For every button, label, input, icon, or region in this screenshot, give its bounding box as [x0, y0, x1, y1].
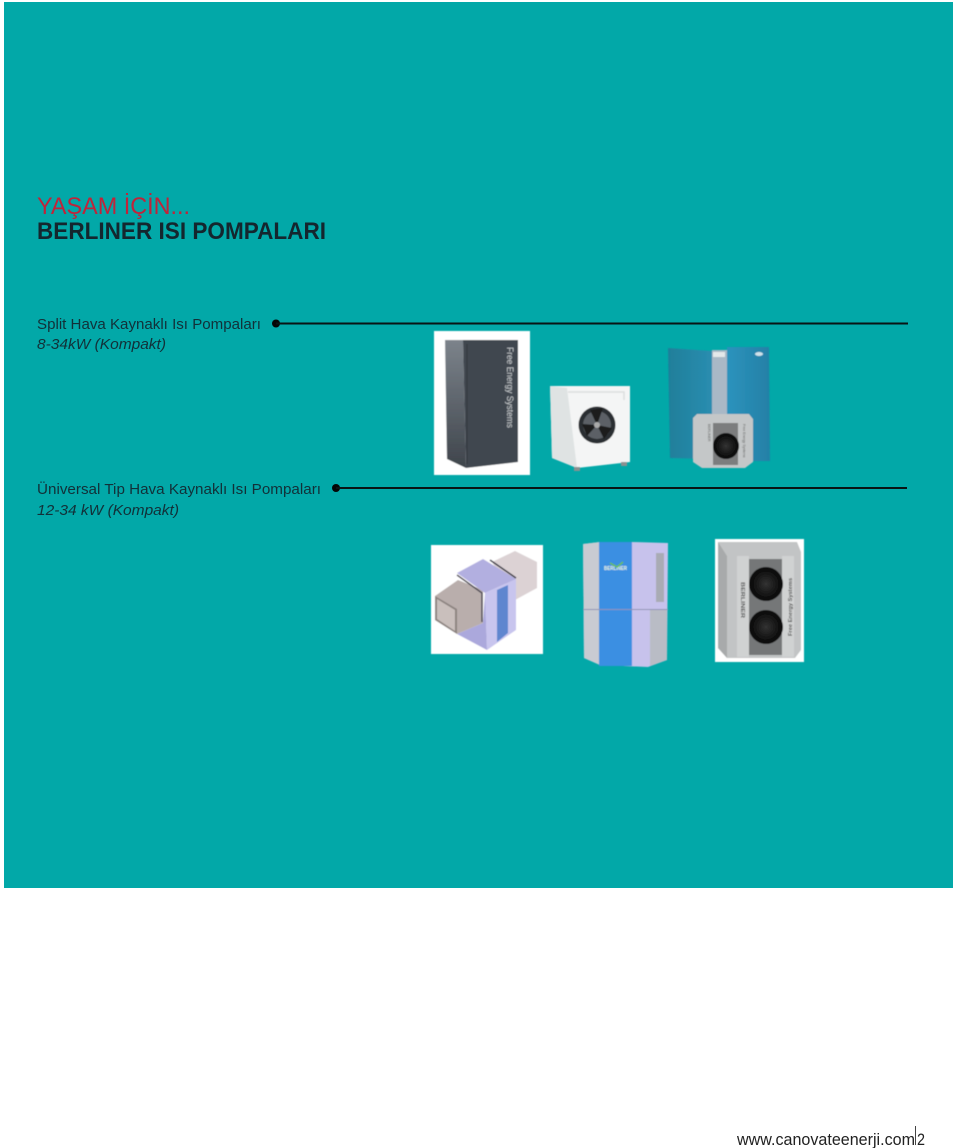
product: dark cabinet [434, 331, 530, 475]
product: blue cabinet with outdoor unit: BERLINER [707, 424, 711, 442]
product: twin fan outdoor unit: BERLINER [739, 582, 745, 618]
teal background panel [4, 2, 953, 888]
section 1 label: split [37, 316, 261, 353]
section 1 label: split: 8-34kW (Kompakt) [37, 336, 166, 353]
leader line 2 [332, 484, 907, 492]
title: BERLINER ISI POMPALARI [37, 218, 326, 245]
section 1 label: split: Split Hava Kaynaklı Isı Pompaları [37, 316, 261, 333]
product: twin fan outdoor unit [715, 539, 804, 662]
product: berliner blue and lilac unit: BERLINER [604, 566, 627, 572]
section 2 label: universal: 12-34 kW (Kompakt) [37, 502, 179, 519]
product: twin fan outdoor unit: Free Energy Systems [788, 578, 794, 636]
product: berliner blue and lilac unit [583, 542, 668, 667]
title: YAŞAM İÇİN... [37, 193, 190, 220]
title [37, 193, 326, 245]
product: blue cabinet with outdoor unit [668, 347, 770, 468]
section 2 label: universal: Üniversal Tip Hava Kaynaklı Isı Pompaları [37, 480, 321, 498]
product: ducted unit [431, 545, 543, 654]
leader line 1 [272, 320, 908, 328]
product: dark cabinet: Free Energy Systems [505, 347, 515, 428]
product: blue cabinet with outdoor unit: Free Energy Systems [742, 424, 746, 458]
product: white fan unit [550, 386, 630, 471]
section 2 label: universal [37, 480, 321, 519]
